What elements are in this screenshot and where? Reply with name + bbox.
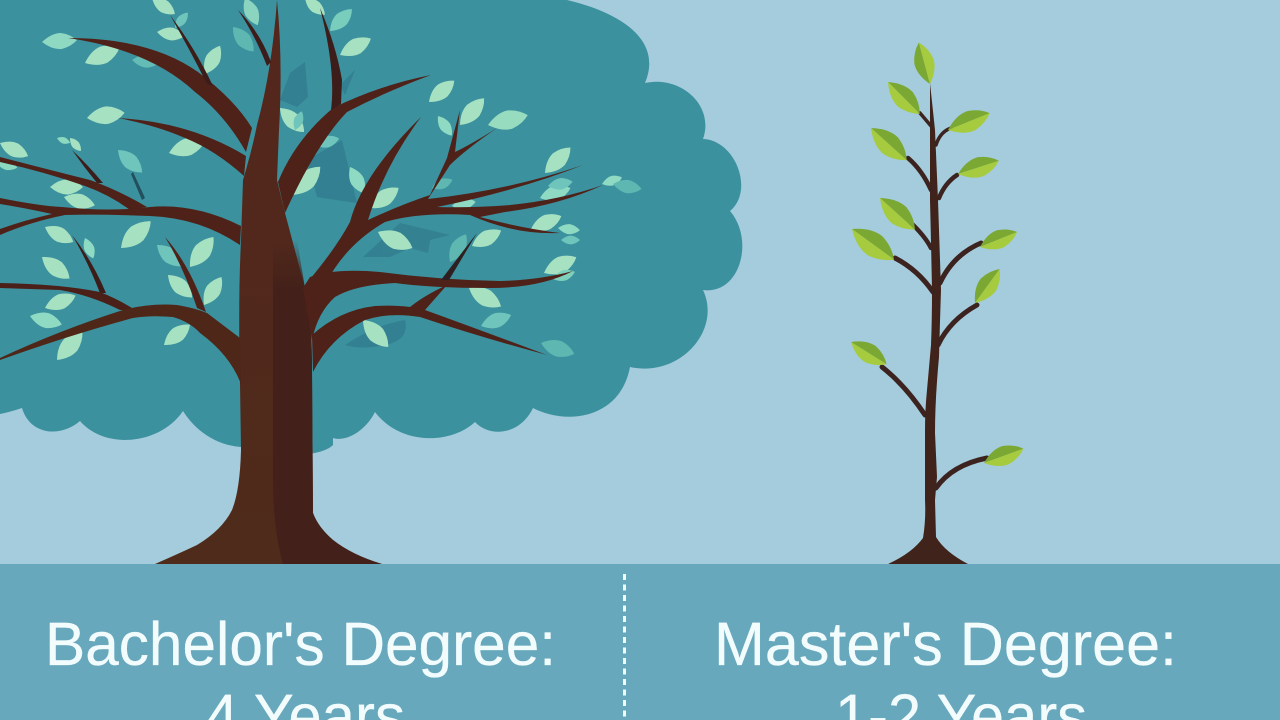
left branches xyxy=(68,38,252,152)
label: master's degree: Master's Degree: xyxy=(714,610,1177,678)
sapling leaves xyxy=(845,40,1027,472)
label: master's degree xyxy=(714,610,1177,720)
label: bachelor's degree xyxy=(45,610,556,720)
panel: master's sapling xyxy=(845,40,1027,564)
tree canopy xyxy=(0,0,742,455)
canopy shadows xyxy=(280,62,450,348)
tree trunk and branches xyxy=(0,0,603,564)
leaves on the tree xyxy=(0,0,643,366)
label: bachelor's degree: Bachelor's Degree: xyxy=(45,610,556,678)
right branches xyxy=(278,75,431,213)
ground band xyxy=(0,564,1280,720)
dotted divider xyxy=(623,574,626,720)
panel: bachelor's tree xyxy=(0,0,742,564)
sapling stem and branches xyxy=(888,83,968,564)
